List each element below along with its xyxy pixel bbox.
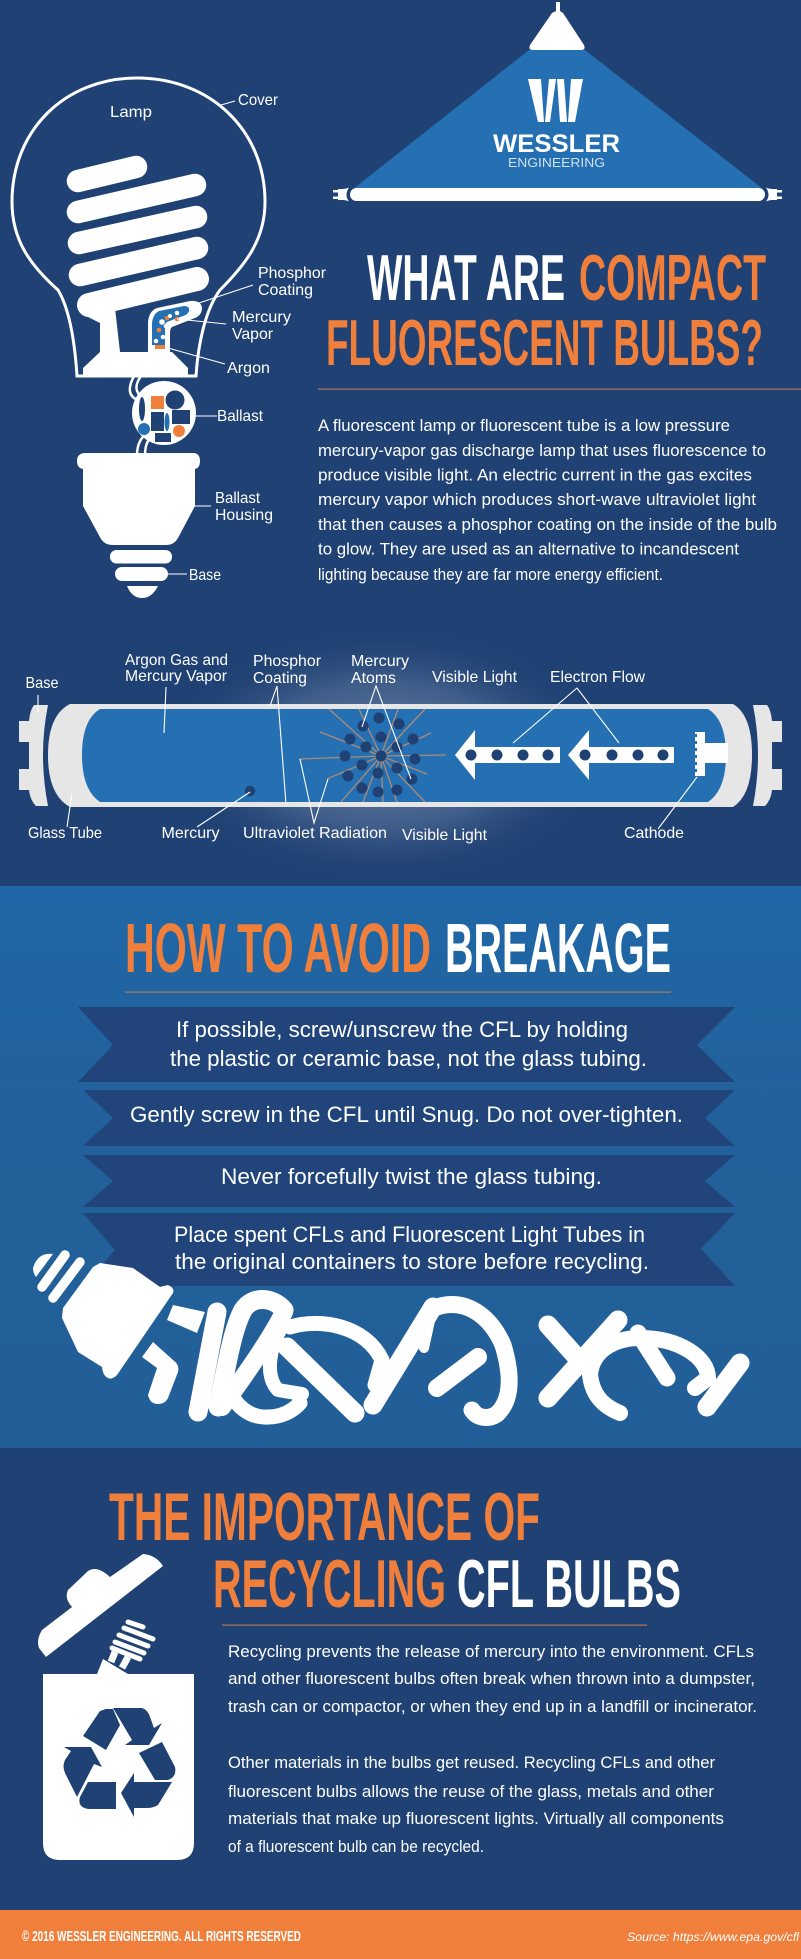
- label: mercury vapor: [232, 309, 291, 343]
- label: mercury atoms: Atoms: [351, 670, 396, 687]
- bin body: [43, 1659, 194, 1860]
- mercury vapor dots: [154, 311, 179, 349]
- tube diagram: [19, 652, 782, 844]
- source: Source: https://www.epa.gov/cfl: [627, 1930, 799, 1944]
- label: phosphor coating: [253, 653, 322, 687]
- label: cathode: Cathode: [624, 825, 684, 842]
- label: ballast: Ballast: [217, 408, 264, 425]
- logo subtitle: ENGINEERING: [508, 155, 605, 170]
- phosphor tube cutaway: [148, 301, 202, 352]
- base tip: [33, 1254, 53, 1277]
- label: ballast housing: Housing: [215, 507, 273, 524]
- mercury droplet: [245, 786, 255, 796]
- label: phosphor coating: [258, 265, 327, 299]
- section background: intro: [0, 0, 801, 886]
- intro paragraph: that then causes a phosphor coating on the inside of the bulb: [318, 516, 777, 534]
- recycling paragraph one: and other fluorescent bulbs often break when thrown into a dumpster,: [228, 1670, 755, 1688]
- section background: breakage: [0, 886, 801, 1448]
- recycling paragraph two: fluorescent bulbs allows the reuse of the glass, metals and other: [228, 1783, 715, 1801]
- ribbon 1: [78, 1007, 735, 1082]
- CFL bulb diagram: [12, 78, 327, 598]
- intro paragraph: A fluorescent lamp or fluorescent tube is a low pressure: [318, 417, 730, 435]
- cathode: [695, 732, 728, 776]
- ballast wires: [130, 376, 152, 455]
- ribbon 3: [83, 1155, 735, 1207]
- ribbon 4: the original containers to store before recycling.: [175, 1249, 649, 1274]
- breakage heading: HOW TO AVOID: [125, 909, 431, 987]
- fluorescent tube: [350, 188, 765, 201]
- recycling paragraph two: of a fluorescent bulb can be recycled.: [228, 1838, 484, 1856]
- footer bar: [0, 1910, 801, 1959]
- ribbon 4: [83, 1213, 735, 1286]
- copyright: © 2016 WESSLER ENGINEERING. ALL RIGHTS RESERVED: [22, 1928, 301, 1945]
- label: phosphor coating: Phosphor: [253, 653, 322, 670]
- phosphor tube interior: [152, 306, 189, 345]
- intro paragraph: lighting because they are far more energy efficient.: [318, 566, 663, 584]
- label: electron flow: Electron Flow: [550, 669, 645, 686]
- pointer lines: [168, 101, 253, 574]
- bulb base: [62, 1263, 173, 1379]
- recycling paragraph one: Recycling prevents the release of mercury into the environment. CFLs: [228, 1643, 754, 1661]
- ribbon 4: Place spent CFLs and Fluorescent Light Tubes in: [174, 1222, 645, 1247]
- label: mercury: Mercury: [162, 825, 220, 842]
- mercury atoms: [340, 712, 420, 798]
- label: glass tube: Glass Tube: [28, 825, 102, 842]
- ribbon 2: Gently screw in the CFL until Snug. Do not over-tighten.: [130, 1102, 683, 1127]
- label: ballast housing: [215, 490, 273, 524]
- broken bulb illustration: [33, 1254, 740, 1417]
- tube left plug: [333, 188, 349, 202]
- screw base: [110, 550, 172, 598]
- main title: WHAT ARE: [367, 241, 565, 314]
- logo lamp: [333, 2, 782, 202]
- intro paragraph: [318, 417, 777, 584]
- right base cap: [753, 705, 782, 806]
- ribbon 1: the plastic or ceramic base, not the glass tubing.: [170, 1046, 647, 1071]
- ribbon 1: If possible, screw/unscrew the CFL by holding: [176, 1017, 628, 1042]
- ballast circuit board: [132, 381, 196, 445]
- recycling bin illustration: [38, 1554, 194, 1860]
- electron arrow right: [568, 730, 674, 780]
- intro paragraph: mercury vapor which produces short-wave ultraviolet light: [318, 491, 756, 509]
- label: argon gas and mercury vapor: Argon Gas and: [125, 652, 228, 669]
- lamp light cone: [353, 50, 763, 189]
- label: lamp: Lamp: [110, 104, 152, 121]
- label: visible light top: Visible Light: [432, 669, 518, 686]
- tube pointer lines: [38, 686, 697, 829]
- label: argon gas and mercury vapor: [125, 652, 228, 685]
- bulb stem and collar: [80, 308, 188, 376]
- tube interior: [82, 709, 726, 802]
- intro paragraph: to glow. They are used as an alternative to incandescent: [318, 540, 739, 558]
- intro paragraph: mercury-vapor gas discharge lamp that uses fluorescence to: [318, 442, 766, 460]
- bin lid: [38, 1554, 163, 1657]
- glow behind tube: [160, 625, 610, 885]
- label: cover: Cover: [238, 92, 279, 109]
- label: mercury vapor: Vapor: [232, 326, 274, 343]
- label: mercury atoms: [351, 653, 409, 687]
- logo wordmark: WESSLER: [493, 130, 620, 158]
- label: phosphor coating: Phosphor: [258, 265, 327, 282]
- spiral tube: [78, 167, 197, 305]
- main title: [326, 241, 766, 379]
- label: base: Base: [26, 675, 59, 692]
- recycling symbol: [64, 1708, 175, 1817]
- label: mercury atoms: Mercury: [351, 653, 409, 670]
- label: ultraviolet radiation: Ultraviolet Radiation: [243, 825, 387, 842]
- recycling heading: [109, 1479, 681, 1622]
- label: phosphor coating: Coating: [253, 670, 307, 687]
- glass tube: [48, 704, 752, 807]
- label: base: Base: [189, 567, 221, 584]
- bulb cover outline: [12, 78, 265, 376]
- intro paragraph: produce visible light. An electric current in the gas excites: [318, 466, 752, 484]
- CFL in bin: [111, 1622, 153, 1668]
- label: argon gas and mercury vapor: Mercury Vapor: [125, 668, 228, 685]
- ribbon 2: [83, 1090, 735, 1146]
- label: argon: Argon: [227, 360, 270, 377]
- recycling paragraph two: Other materials in the bulbs get reused. Recycling CFLs and other: [228, 1754, 716, 1772]
- lamp shade: [529, 2, 585, 50]
- label: phosphor coating: Coating: [258, 282, 313, 299]
- recycling paragraph two: materials that make up fluorescent lights. Virtually all components: [228, 1810, 724, 1828]
- broken tube fragments: [142, 1300, 740, 1417]
- ribbon 3: Never forcefully twist the glass tubing.: [221, 1164, 602, 1189]
- label: mercury vapor: Mercury: [232, 309, 291, 326]
- left base cap: [19, 705, 48, 806]
- recycling heading: RECYCLING: [213, 1546, 446, 1622]
- ultraviolet rays: [299, 709, 446, 802]
- tube right plug: [766, 188, 782, 202]
- recycling paragraph one: [228, 1643, 757, 1716]
- section background: recycling: [0, 1448, 801, 1910]
- recycling paragraph two: [228, 1754, 724, 1856]
- logo W mark: [528, 79, 583, 122]
- label: ballast housing: Ballast: [215, 490, 261, 507]
- ballast housing: [77, 453, 200, 545]
- recycling paragraph one: trash can or compactor, or when they end up in a landfill or incinerator.: [228, 1698, 757, 1716]
- label: visible light bottom: Visible Light: [402, 827, 488, 844]
- base threads: [42, 1255, 80, 1298]
- electron arrow left: [455, 730, 560, 780]
